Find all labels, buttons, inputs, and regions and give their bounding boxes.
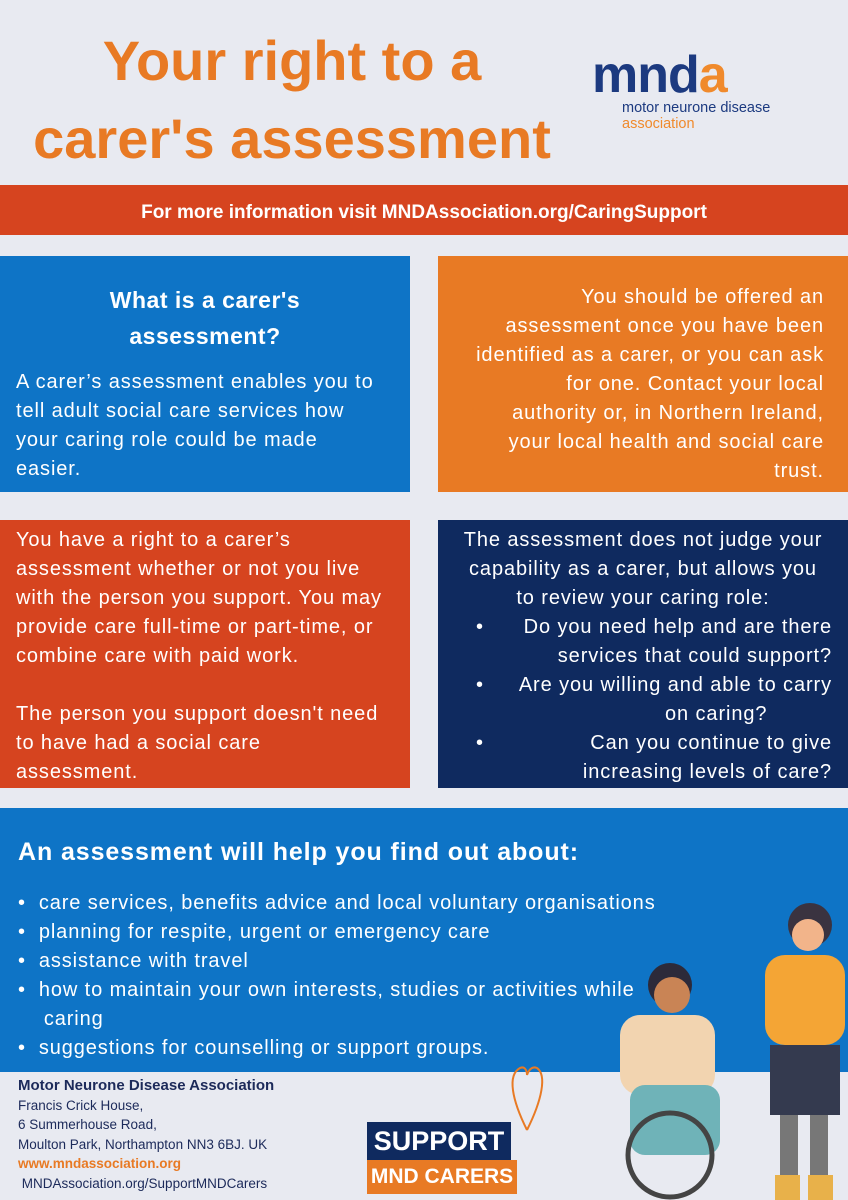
- title: Your right to a: [103, 29, 481, 92]
- panel: right: The person you support doesn't need: [16, 703, 378, 725]
- panel: right: You have a right to a carer’s: [16, 529, 291, 551]
- footer address: Francis Crick House,: [18, 1098, 143, 1112]
- panel: does not judge: The assessment does not judge your: [464, 529, 822, 551]
- panel: what is: your caring role could be made: [16, 429, 318, 451]
- panel: what is: [0, 256, 410, 492]
- support logo: SUPPORT: [374, 1126, 504, 1156]
- panel: does not judge: •: [476, 674, 484, 696]
- panel: does not judge: to review your caring role:: [516, 587, 770, 609]
- footer address: www.mndassociation.org: [18, 1156, 181, 1171]
- panel: right: combine care with paid work.: [16, 645, 299, 667]
- panel: offered: trust.: [774, 460, 824, 482]
- panel: find out: • assistance with travel: [18, 950, 249, 972]
- support logo: MND CARERS: [371, 1165, 513, 1188]
- panel: does not judge: Do you need help and are there: [524, 616, 832, 638]
- panel: does not judge: •: [476, 616, 484, 638]
- panel: find out: • how to maintain your own interests, studies or activities while: [18, 979, 635, 1001]
- footer address: 6 Summerhouse Road,: [18, 1117, 157, 1132]
- panel: right: assessment whether or not you live: [16, 558, 360, 580]
- panel: does not judge: services that could support?: [558, 645, 832, 667]
- panel: offered: You should be offered an: [581, 286, 824, 308]
- footer address: Motor Neurone Disease Association: [18, 1077, 274, 1094]
- panel: offered: [438, 256, 848, 492]
- panel: does not judge: Are you willing and able to carry: [519, 674, 832, 696]
- panel: does not judge: [438, 520, 848, 788]
- panel: find out: caring: [44, 1008, 104, 1030]
- logo: association: [622, 116, 695, 132]
- logo: [592, 46, 770, 132]
- banner: [0, 185, 848, 235]
- banner: For more information visit MNDAssociation.org/CaringSupport: [141, 202, 707, 223]
- panel: right: provide care full-time or part-time, or: [16, 616, 373, 638]
- panel: offered: your local health and social care: [509, 431, 824, 453]
- panel: does not judge: •: [476, 732, 484, 754]
- panel: does not judge: Can you continue to give: [590, 732, 832, 754]
- footer address: Moulton Park, Northampton NN3 6BJ. UK: [18, 1136, 267, 1152]
- panel: find out: • care services, benefits advice and local voluntary organisations: [18, 892, 656, 914]
- panel: right: [0, 520, 410, 788]
- panel: right: with the person you support. You may: [16, 587, 382, 609]
- panel: offered: identified as a carer, or you can ask: [476, 344, 824, 366]
- panel: what is: assessment?: [129, 323, 281, 349]
- panel: offered: for one. Contact your local: [566, 373, 824, 395]
- logo: motor neurone disease: [622, 100, 770, 116]
- panel: what is: What is a carer's: [110, 287, 300, 313]
- panel: what is: A carer’s assessment enables you to: [16, 371, 374, 393]
- panel: find out: • planning for respite, urgent or emergency care: [18, 921, 490, 943]
- footer address: [18, 1077, 274, 1191]
- panel: does not judge: on caring?: [665, 703, 767, 725]
- panel: offered: assessment once you have been: [505, 315, 824, 337]
- panel: right: assessment.: [16, 761, 138, 783]
- title: [33, 29, 551, 170]
- footer address: MNDAssociation.org/SupportMNDCarers: [22, 1176, 267, 1190]
- panel: does not judge: capability as a carer, but allows you: [469, 558, 817, 580]
- panel: find out: • suggestions for counselling or support groups.: [18, 1037, 489, 1059]
- illustration: carers: [620, 903, 845, 1200]
- panel: right: to have had a social care: [16, 732, 261, 754]
- title: carer's assessment: [33, 107, 551, 170]
- panel: find out: [0, 808, 848, 1072]
- logo: mnda: [592, 46, 727, 104]
- panel: does not judge: increasing levels of care?: [583, 761, 832, 783]
- panel: what is: easier.: [16, 458, 81, 480]
- support logo: [367, 1066, 544, 1194]
- panel: what is: tell adult social care services how: [16, 400, 344, 422]
- panel: offered: authority or, in Northern Ireland,: [512, 402, 824, 424]
- panel: find out: An assessment will help you find out about:: [18, 838, 579, 866]
